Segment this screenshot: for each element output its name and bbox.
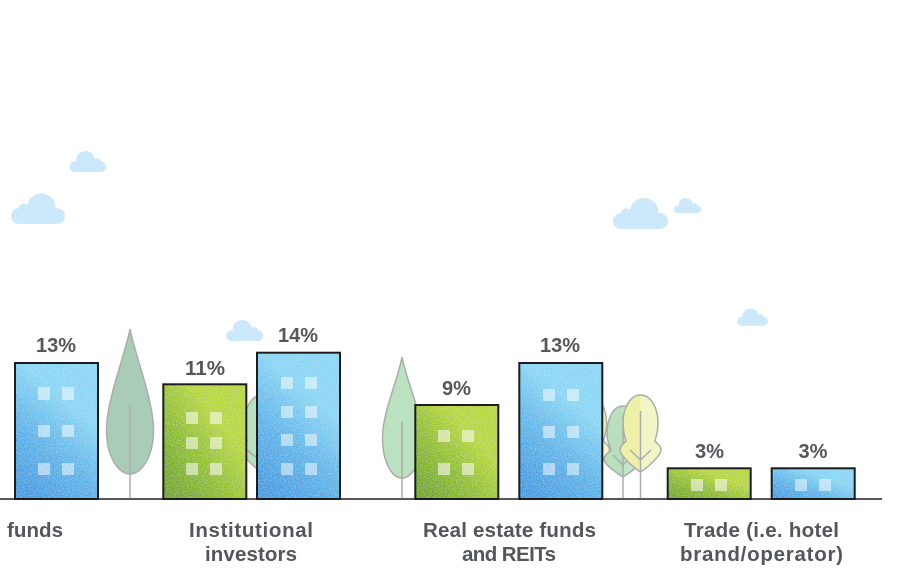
cloud 3 bbox=[226, 320, 263, 341]
ground line bbox=[0, 498, 882, 500]
label: Real estate funds and REITs: and REITs bbox=[462, 543, 556, 566]
value: 11%: 11% bbox=[185, 358, 225, 380]
cloud 1 bbox=[70, 151, 106, 172]
building: blue 13% real estate bbox=[519, 363, 602, 499]
tree: green leaf behind institutional buildings bbox=[242, 395, 282, 473]
label: Institutional investors: investors bbox=[205, 543, 297, 566]
label: Trade (i.e. hotel brand/operator) bbox=[680, 519, 843, 566]
building: green 11% institutional bbox=[163, 384, 246, 499]
label: Trade (i.e. hotel brand/operator): Trade (i.e. hotel bbox=[684, 519, 839, 542]
cloud 6 bbox=[737, 308, 768, 326]
value: 13%: 13% bbox=[36, 335, 76, 357]
building: blue 3% trade bbox=[772, 468, 855, 499]
tree: light green teardrop bbox=[382, 357, 422, 499]
cloud 2 bbox=[11, 194, 65, 224]
value: 13%: 13% bbox=[540, 335, 580, 357]
building: green 3% trade bbox=[668, 468, 751, 499]
tree: green leaf bbox=[604, 406, 642, 499]
tree: tall dark teardrop bbox=[106, 329, 154, 499]
building: green 9% real estate bbox=[415, 405, 498, 499]
label: Trade (i.e. hotel brand/operator): brand/operator) bbox=[680, 543, 843, 566]
cloud 4 bbox=[613, 198, 668, 229]
label: Real estate funds and REITs bbox=[423, 519, 596, 566]
label: funds: funds bbox=[7, 519, 63, 542]
tree: yellow leaf behind real estate building bbox=[568, 395, 610, 472]
label: Institutional investors bbox=[189, 519, 313, 566]
tree: yellow leaf front bbox=[620, 395, 661, 499]
building: blue 13% funds bbox=[15, 363, 98, 499]
value: 3%: 3% bbox=[695, 441, 724, 463]
label: Real estate funds and REITs: Real estate funds bbox=[423, 519, 596, 542]
value: 3%: 3% bbox=[798, 441, 828, 463]
value: 9%: 9% bbox=[442, 378, 471, 400]
building: blue 14% institutional bbox=[257, 353, 340, 499]
value: 14%: 14% bbox=[278, 325, 318, 347]
label: Institutional investors: Institutional bbox=[189, 519, 313, 542]
cloud 5 bbox=[674, 198, 701, 213]
